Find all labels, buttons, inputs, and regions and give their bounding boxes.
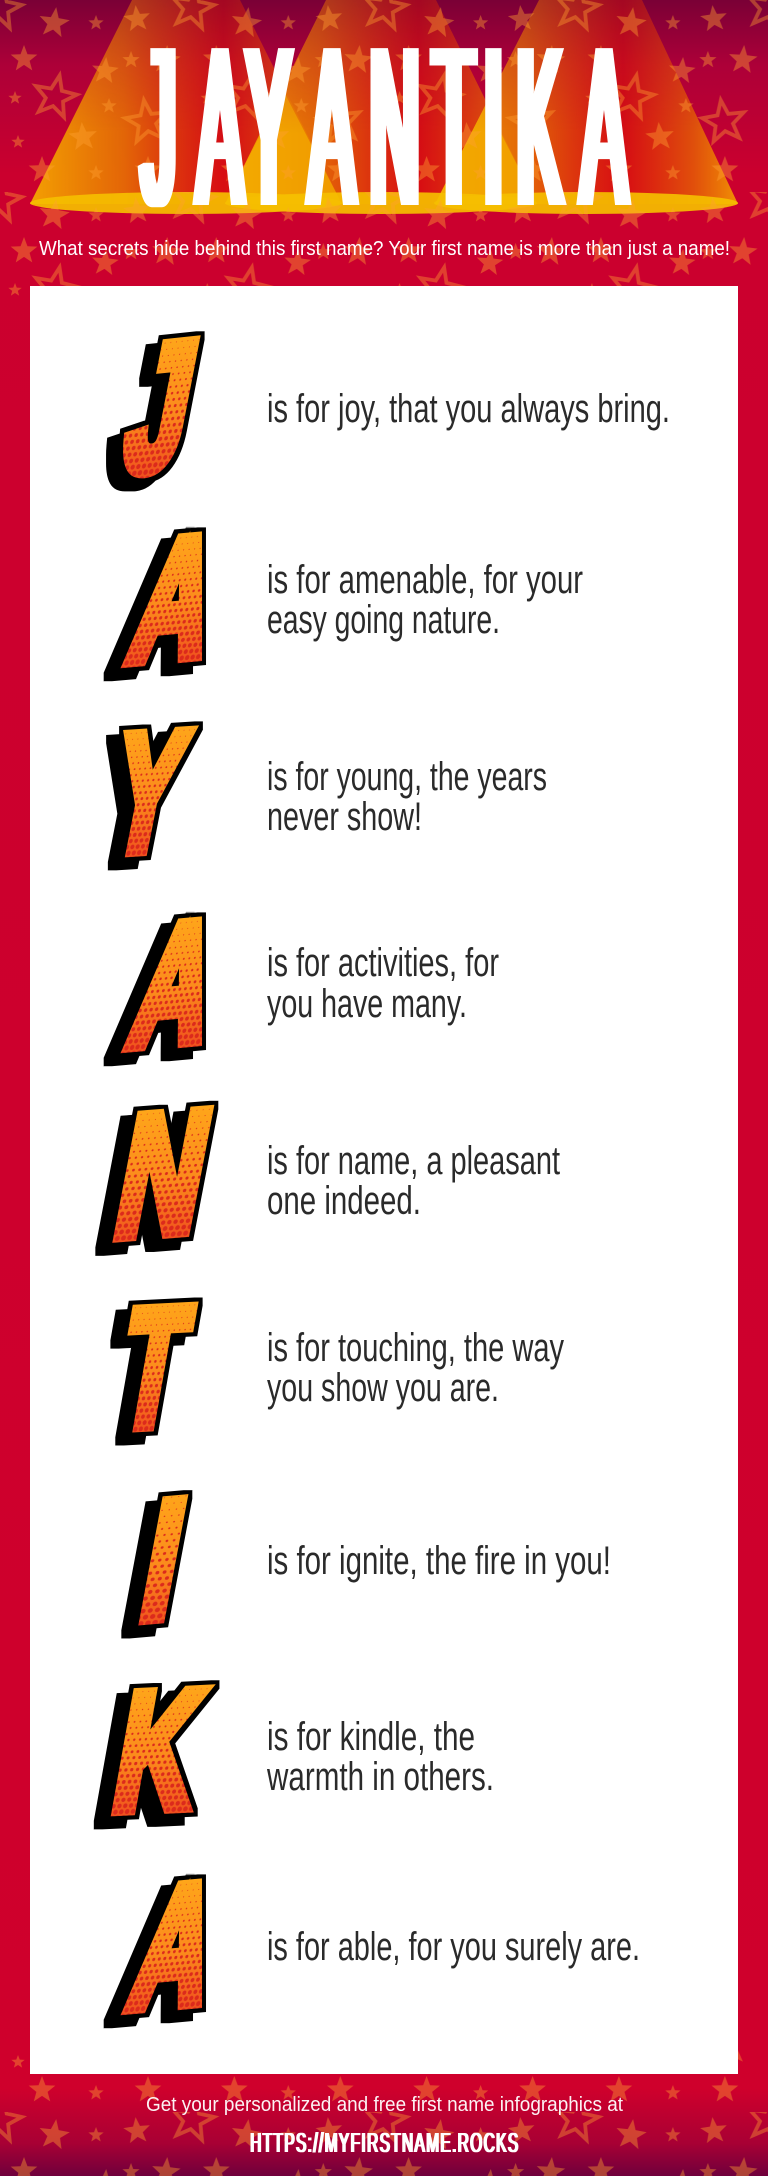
title: JAYANTIKA <box>142 0 627 254</box>
line: T <box>267 1326 564 1410</box>
line: Y <box>267 755 547 839</box>
line: A <box>267 941 499 1026</box>
line: T: you show you are. <box>267 1366 499 1410</box>
panel: white letters panel <box>30 286 738 2074</box>
line: A: is for activities, for <box>267 941 499 985</box>
letter I: I <box>126 1462 200 1659</box>
line: A: easy going nature. <box>267 598 500 642</box>
star pattern bottom <box>0 2050 768 2176</box>
line: Y: never show! <box>267 795 422 839</box>
footer line: Get your personalized and free first name infographics at <box>146 2094 623 2116</box>
letter Y: Y <box>97 696 199 888</box>
line: I: is for ignite, the fire in you! <box>267 1539 611 1583</box>
line: T: is for touching, the way <box>267 1326 564 1370</box>
letter N: N <box>103 1075 223 1273</box>
line: N: one indeed. <box>267 1179 421 1223</box>
line: N <box>267 1139 560 1223</box>
line: A <box>267 558 583 642</box>
letter A: A <box>118 1848 233 2044</box>
letter T: T <box>107 1270 202 1464</box>
star pattern top <box>0 0 768 300</box>
letter J: J <box>112 304 210 511</box>
line: A: is for able, for you surely are. <box>267 1925 640 1969</box>
spotlights <box>30 0 738 214</box>
letter A: A <box>118 501 233 697</box>
line: A: is for amenable, for your <box>267 558 583 602</box>
subtitle: What secrets hide behind this first name? Your first name is more than just a name! <box>39 238 730 260</box>
line: K: is for kindle, the <box>267 1715 475 1759</box>
letter K: K <box>102 1656 214 1846</box>
line: K: warmth in others. <box>266 1755 494 1799</box>
letter A: A <box>118 886 233 1082</box>
footer url: HTTPS://MYFIRSTNAME.ROCKS <box>250 2127 518 2158</box>
line: K <box>266 1715 494 1799</box>
line: N: is for name, a pleasant <box>267 1139 560 1183</box>
line: Y: is for young, the years <box>267 755 547 799</box>
line: A: you have many. <box>267 982 467 1026</box>
